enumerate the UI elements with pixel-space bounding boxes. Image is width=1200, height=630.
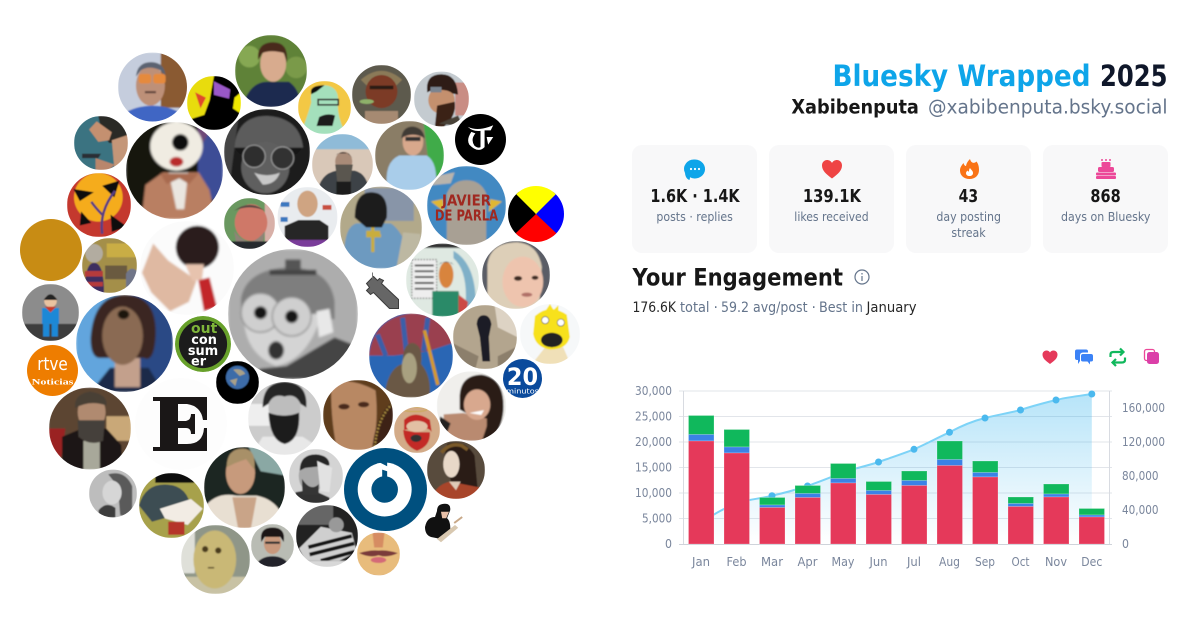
avatar bubble cluster [20,35,580,594]
month labels: Feb [726,555,746,569]
avatar: blue donut logo [344,448,427,531]
panel: days on Bluesky [1043,145,1168,253]
avatar: big retro goggles kid [228,249,358,379]
avatar: woman with red drape [140,224,221,312]
avatar: earth on black [216,361,259,404]
month labels [691,555,1102,569]
panel: posts and replies: posts · replies [656,209,733,224]
avatar: bearded cartoon portrait [352,65,411,124]
icon: legend quotes [1144,350,1159,364]
chart: monthly engagement stacked bars with cumulative line [635,384,1165,569]
avatar: mummy cartoon Javier de Parla: JAVIER [441,192,491,210]
panel: day posting streak: 43 [959,186,978,207]
engagement summary: 59.2 avg/post [721,300,808,316]
avatar: cartoon man with speech bubble [406,244,479,316]
avatar: black and white bearded man [248,382,321,455]
avatar: man covering face [289,449,343,503]
icon: legend heart [1042,350,1058,364]
engagement summary: · [714,300,718,316]
month labels: Oct [1012,555,1030,569]
panel: likes received: likes received [794,209,869,224]
panel: likes received: 139.1K [803,186,862,207]
avatar: mummy cartoon Javier de Parla: DE PARLA [435,207,498,225]
avatar: outconsumer logo: sum [188,344,218,359]
avatar: umbrella and marmot [369,314,453,398]
left axis labels: 0 [665,537,672,551]
avatar: Homer Simpson meme [520,304,580,364]
avatar: woman with dark hair smiling [437,371,506,441]
avatar: man with orange sunglasses [118,52,187,122]
avatar: four-colour quadrant logo [508,186,564,242]
avatar: mummy cartoon Javier de Parla [427,166,506,245]
avatar: rtve noticias logo: rtve [37,355,68,375]
right axis labels: 160,000 [1122,401,1165,415]
left axis labels: 5,000 [642,512,672,526]
avatar: cartoon with teal hair [139,473,204,538]
icon: legend reposts [1110,348,1125,366]
avatar: yellow and black silhouette [187,76,241,130]
cumulative area [701,394,1092,544]
avatar: outconsumer logo: out [191,321,218,337]
engagement summary: total [680,300,710,316]
avatar: outconsumer logo [175,316,231,372]
right axis labels [1122,401,1165,551]
panel: days on Bluesky: 868 [1090,186,1121,207]
avatar: green cartoon man [298,81,351,134]
panel: day posting streak: streak [951,225,986,240]
panel: days on Bluesky: days on Bluesky [1061,209,1151,224]
avatar: man at sponsor table [278,187,338,247]
engagement summary: · [812,300,816,316]
avatar: cyclops in suit [126,122,223,219]
avatar: rtve noticias logo [27,345,78,396]
month labels: Sep [975,555,995,569]
title: 2025 [1100,59,1168,93]
month labels: Jan [691,555,710,569]
avatar: red-faced bald man [224,198,275,249]
avatar: cartoon woman in kitchen [82,238,137,293]
avatar: outconsumer logo: er [191,354,207,369]
right axis labels: 40,000 [1122,503,1158,517]
icon: birthday cake [1096,159,1116,179]
avatar: bearded colour portrait [49,388,131,470]
user name and handle [791,96,1168,118]
icon: legend replies [1075,350,1093,364]
avatar: 20 minutos logo: 20 [507,363,538,391]
avatar: potato with eyes [181,525,250,594]
left axis labels: 30,000 [635,384,672,398]
avatar: Darth Vader in blue shirt [340,186,422,268]
avatar: plain ochre circle [20,219,82,281]
user name and handle: @xabibenputa.bsky.social [928,96,1168,118]
month labels: May [832,555,854,569]
avatar: Playmobil figure [22,284,79,341]
avatar: outconsumer logo: con [191,333,217,348]
icon: flame [960,159,979,179]
avatar: old man close-up [323,380,393,450]
left axis labels: 20,000 [635,435,672,449]
avatar: woman on rocks [453,305,517,369]
avatar: Anne of Bohemia painting [427,441,485,499]
engagement summary: Best in [819,300,863,316]
avatar: woman with pistol painting [74,116,128,170]
avatar: bob-haired woman grayscale [89,470,137,518]
engagement summary [632,300,916,316]
avatar: curly-haired man looking down [414,72,469,126]
legend icons [1042,348,1159,366]
avatar: woman in blue blouse [375,121,444,190]
engagement summary: 176.6K [632,300,677,316]
avatar: bearded man in plaza [312,134,373,195]
avatar: El Español E logo [135,378,227,470]
month labels: Nov [1045,555,1067,569]
user name and handle: Xabibenputa [791,96,919,118]
panel: day posting streak: day posting [936,209,1001,224]
avatar: red-bearded saint doodle [394,407,440,453]
avatar: moustache close-up [357,532,400,576]
title: Bluesky Wrapped [832,59,1090,93]
left axis labels: 10,000 [635,486,672,500]
panel: posts and replies: 1.6K · 1.4K [650,186,740,207]
avatar: crows against yellow moon [67,173,131,237]
month labels: Dec [1081,555,1102,569]
avatar: side-eye blonde toddler [482,241,550,309]
left axis labels [635,384,672,551]
avatar: helmet and goggles portrait [224,109,310,195]
avatar: curly man with glasses [251,524,294,567]
avatar: young man in foliage [235,35,307,107]
avatar: blonde woman in car [204,447,285,528]
panel: likes received [769,145,894,253]
avatar: guitarist illustration [425,504,462,542]
icon: heart [822,160,842,178]
avatar: dog-headed woman [76,295,173,392]
avatar: striped cat black and white [296,505,358,567]
right axis labels: 80,000 [1122,469,1158,483]
panel: posts and replies [632,145,757,253]
avatar: New York Times logo [455,114,506,165]
cumulative line with points [701,390,1095,523]
month labels: Apr [798,555,818,569]
chart grid lines [679,391,1112,544]
avatar: rtve noticias logo: Noticias [32,376,74,386]
avatar: 20 minutos logo [503,359,542,398]
left axis labels: 25,000 [635,410,672,424]
right axis labels: 120,000 [1122,435,1165,449]
avatar: 20 minutos logo: minutos [506,386,539,395]
month labels: Mar [761,555,783,569]
left axis labels: 15,000 [635,460,672,474]
month labels: Jul [906,555,921,569]
heading: Your Engagement: Your Engagement [632,264,843,292]
stacked bars [688,416,1104,544]
engagement summary: January [866,300,916,316]
month labels: Jun [869,555,888,569]
icon: info [855,270,869,284]
month labels: Aug [939,555,960,569]
panel: day posting streak [906,145,1031,253]
icon: speech bubble [684,159,705,180]
right axis labels: 0 [1122,537,1129,551]
icon: sword emoji [366,272,398,308]
